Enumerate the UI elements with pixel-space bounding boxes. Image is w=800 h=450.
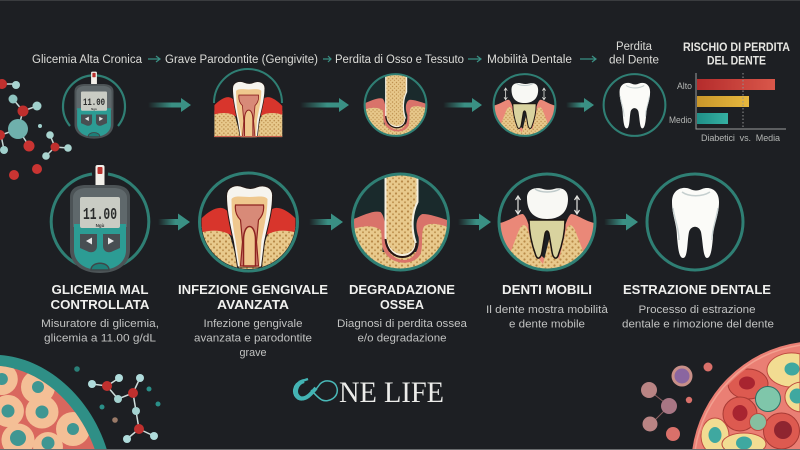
step 3 text: OSSEA <box>380 297 425 312</box>
step 5 text <box>622 282 774 330</box>
top row: small glucose meter <box>63 72 125 139</box>
top flow headers: Glicemia Alta Cronica <box>32 54 143 66</box>
step 5 text: dentale e rimozione del dente <box>622 318 774 330</box>
chart title: RISCHIO DI PERDITA <box>683 40 790 54</box>
chart title: DEL DENTE <box>707 54 766 68</box>
arrow <box>300 98 349 112</box>
top row: lost tooth <box>604 74 665 136</box>
top row: infected tooth <box>213 68 283 138</box>
step 5 text: ESTRAZIONE DENTALE <box>623 282 771 297</box>
step 2 text: INFEZIONE GENGIVALE <box>178 282 328 297</box>
floating cells bottom right <box>641 362 712 441</box>
main row: infected tooth <box>196 173 300 274</box>
top flow headers <box>32 41 659 66</box>
top row: mobile tooth <box>491 74 558 139</box>
step 4 text <box>486 282 609 330</box>
chart title <box>683 40 790 68</box>
molecules left <box>0 79 72 180</box>
bars <box>697 79 775 124</box>
step 2 text: Infezione gengivale <box>204 318 302 330</box>
step 4 text: e dente mobile <box>509 318 585 330</box>
step 1 text: CONTROLLATA <box>50 297 150 312</box>
arrow <box>566 98 594 112</box>
cell cluster bottom right <box>692 342 800 450</box>
step 2 text: avanzata e parodontite <box>194 332 312 344</box>
axis labels: Diabetici vs. Media <box>701 133 780 143</box>
top flow headers: Perdita <box>616 41 653 53</box>
logo: NE LIFE <box>339 376 444 409</box>
arrow <box>458 214 491 230</box>
step 3 text: DEGRADAZIONE <box>349 282 455 297</box>
molecules bottom left <box>74 366 160 443</box>
step 3 text: e/o degradazione <box>358 332 446 344</box>
top border line <box>0 0 800 1</box>
arrow <box>604 214 638 230</box>
axis labels: Medio <box>669 115 692 125</box>
top flow headers: Mobilità Dentale <box>487 54 572 66</box>
main row: bone loss <box>350 167 450 272</box>
top row: bone loss <box>363 69 428 138</box>
risk chart <box>669 40 790 143</box>
step 3 text <box>337 282 468 344</box>
step 1 text: GLICEMIA MAL <box>52 282 149 297</box>
step 2 text: grave <box>240 347 266 359</box>
step 1 text <box>41 282 159 344</box>
main row: extracted tooth <box>647 174 743 270</box>
step 1 text: glicemia a 11.00 g/dL <box>44 332 156 344</box>
axis labels: Alto <box>677 81 692 91</box>
step 3 text: Diagnosi di perdita ossea <box>337 318 468 330</box>
logo infinity mark <box>294 379 337 401</box>
bottom border line <box>0 449 800 450</box>
step 2 text <box>178 282 328 359</box>
top flow headers: Grave Parodontite (Gengivite) <box>165 54 318 66</box>
arrow <box>443 98 482 112</box>
step 1 text: Misuratore di glicemia, <box>41 318 159 330</box>
top flow headers: del Dente <box>609 54 659 66</box>
arrow <box>309 214 343 230</box>
main row: glucose meter <box>51 165 149 273</box>
arrow <box>148 98 191 112</box>
step 4 text: Il dente mostra mobilità <box>486 304 609 316</box>
step 4 text: DENTI MOBILI <box>502 282 592 297</box>
cell cluster bottom left <box>0 355 107 450</box>
logo <box>294 376 444 409</box>
top flow headers: Perdita di Osso e Tessuto <box>335 54 464 66</box>
arrow <box>158 214 190 230</box>
main row: mobile tooth <box>495 174 599 274</box>
step 5 text: Processo di estrazione <box>638 304 756 316</box>
step 2 text: AVANZATA <box>217 297 290 312</box>
axis labels <box>669 81 780 143</box>
